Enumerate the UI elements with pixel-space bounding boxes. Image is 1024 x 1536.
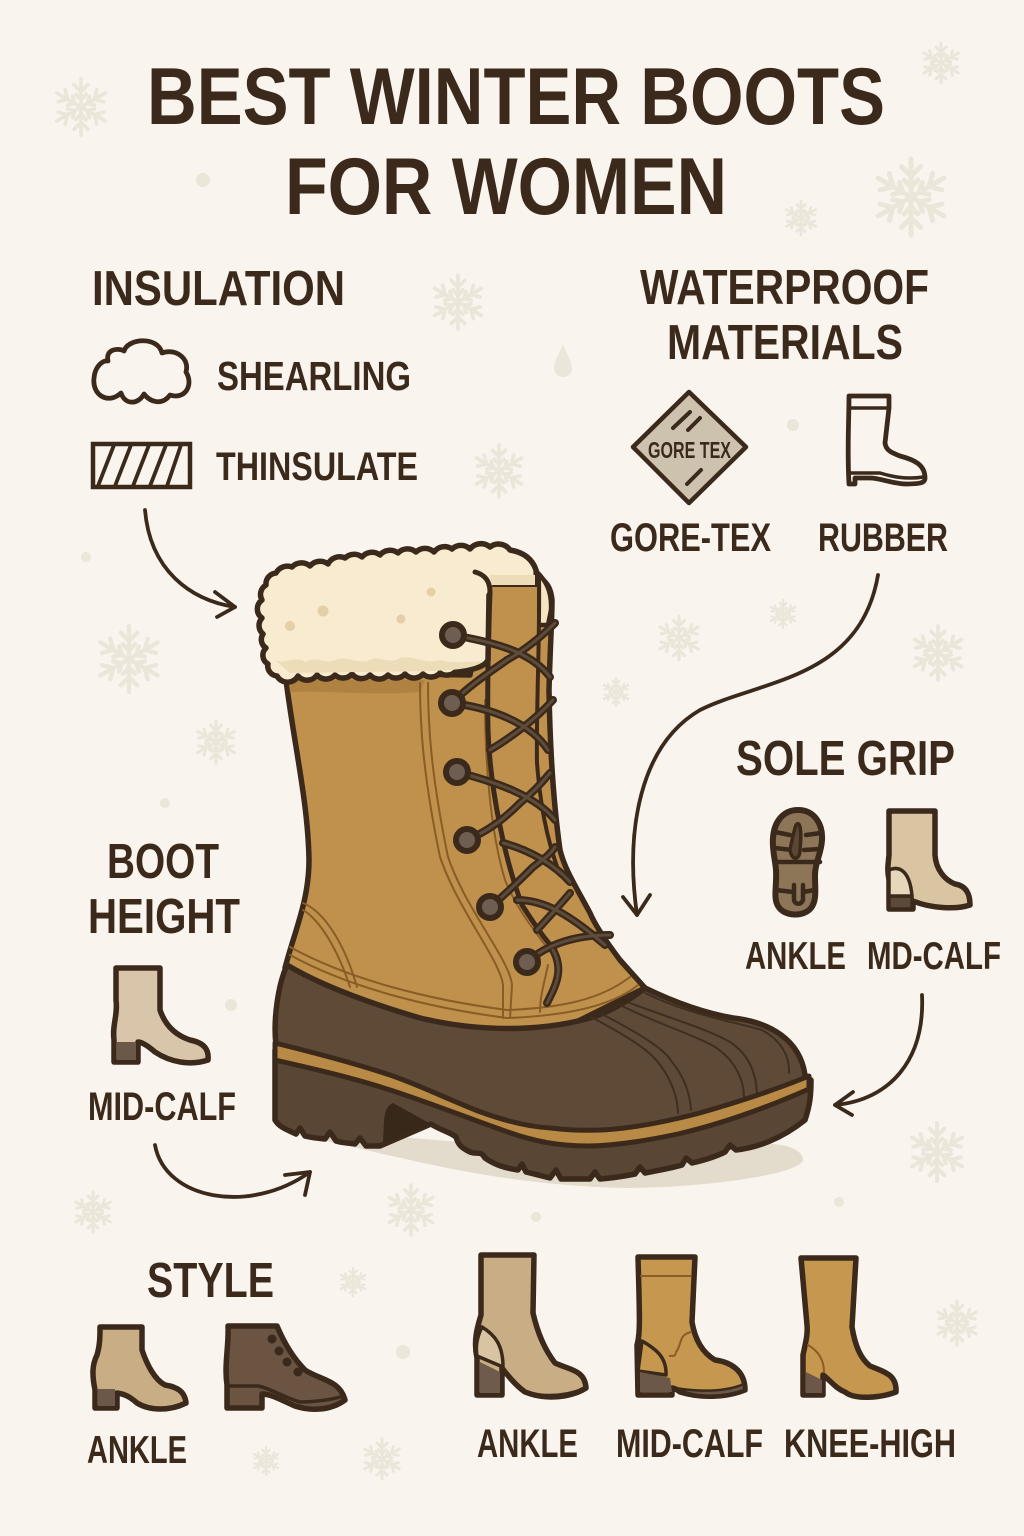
icon: boot sole tread [773, 810, 822, 915]
arrow: rubber to toe [623, 575, 878, 915]
boot rubber lower [275, 965, 809, 1132]
title [147, 52, 885, 232]
label: mid-calf: MID-CALF [616, 1422, 763, 1466]
shearling cuff [257, 544, 537, 682]
label: ankle: ANKLE [87, 1429, 187, 1472]
icon: mid-calf boot [637, 1257, 745, 1396]
title: FOR WOMEN [285, 142, 727, 232]
arrow: insulation to cuff [145, 510, 235, 617]
label: knee-high: KNEE-HIGH [784, 1422, 956, 1466]
panel: boot height [88, 835, 240, 1129]
heading: boot height [88, 835, 240, 944]
label: shearling: SHEARLING [217, 353, 411, 399]
label: mid-calf: MID-CALF [88, 1085, 236, 1129]
tongue top [490, 588, 537, 640]
main boot illustration [257, 544, 811, 1188]
icon: gore-tex diamond: GORE TEX [648, 437, 731, 463]
label: gore-tex: GORE-TEX [610, 516, 771, 560]
shearling cuff back [490, 550, 551, 625]
panel: boot lengths [476, 1255, 956, 1466]
rubber stitching [591, 993, 789, 1113]
icon: rubber boot [848, 396, 925, 484]
cuff shadow [288, 680, 425, 693]
heading: boot height: HEIGHT [88, 890, 240, 944]
icon: shearling cloud [94, 341, 189, 402]
heading: insulation: INSULATION [92, 262, 345, 316]
panel: style [87, 1254, 345, 1472]
panel: waterproof materials [610, 261, 948, 560]
laces [452, 623, 610, 1003]
icon: knee-high boot [801, 1258, 896, 1397]
heading: waterproof materials [640, 261, 929, 370]
panel: insulation [92, 262, 418, 489]
eyelets [441, 624, 538, 973]
heading: style: STYLE [147, 1254, 274, 1308]
cuff details [275, 575, 537, 673]
label: ankle: ANKLE [477, 1422, 578, 1466]
boot leather shaft [285, 570, 645, 1030]
label: thinsulate: THINSULATE [216, 445, 418, 489]
title: BEST WINTER BOOTS [147, 52, 885, 142]
icon: mid-calf tan boot [888, 811, 970, 909]
panel: sole grip [736, 732, 1001, 978]
arrow: sole grip to outsole [835, 995, 922, 1115]
icon: boot height mid-calf [114, 968, 208, 1063]
heading: waterproof materials: MATERIALS [667, 316, 903, 370]
heading: waterproof materials: WATERPROOF [640, 261, 929, 315]
tan welt [275, 1043, 809, 1146]
arrow: boot height to heel [155, 1145, 310, 1197]
boot seams [290, 683, 638, 1018]
heading: boot height: BOOT [107, 835, 219, 889]
icon: ankle bootie [93, 1327, 186, 1409]
label: rubber: RUBBER [818, 516, 948, 560]
icon: gore-tex diamond [633, 392, 746, 503]
boot outsole [275, 1050, 811, 1179]
icon: thinsulate layers [93, 444, 190, 487]
tongue edge [537, 578, 560, 875]
icon: tall ankle boot [476, 1255, 586, 1397]
icon: lace-up bootie [226, 1326, 345, 1409]
heel arch [383, 1103, 431, 1143]
lace panel edge [475, 572, 555, 950]
label: ankle: ANKLE [745, 935, 846, 978]
boot ground shadow [296, 1135, 803, 1188]
heading: sole grip: SOLE GRIP [736, 732, 955, 786]
